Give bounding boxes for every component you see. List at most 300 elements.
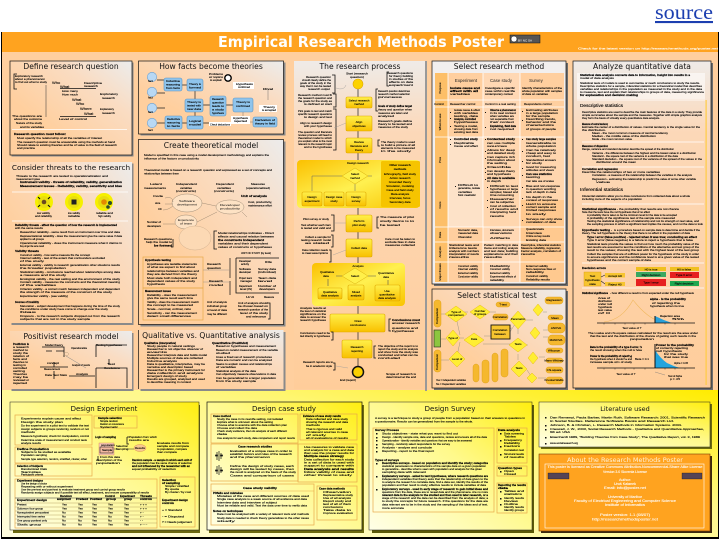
panel: select statistical test: Parametric [511, 317, 526, 321]
panel: design survey: Open [504, 469, 514, 473]
latest version note: Check for the latest version on http://researchmethods.org/poster.net [578, 46, 718, 50]
panel: analyze quantitative data: Regression - estimating the relationship to predict the value of some other variable [592, 177, 696, 181]
panel: how facts become theories: reasoning [167, 120, 180, 124]
panel: create theoretical model: (constructs) [214, 189, 234, 193]
flow: theory box [346, 138, 372, 153]
chart: decision table: Right decision [642, 273, 661, 277]
panel: design experiment: Design the study plan [21, 420, 63, 424]
panel: design experiment: Subjects to be studied as available [21, 450, 71, 454]
panel: analyze quantitative data: is a procedure based on sample data to determine and decide if the [614, 228, 700, 232]
flow: theory box: literature and [350, 144, 368, 148]
panel: about the poster [539, 454, 712, 533]
panel: qualitative vs quantitative analysis: Seeks to explain causes and relationships [216, 362, 272, 366]
panel: select statistical test: T-test [499, 302, 507, 306]
table: methods comparison: Researcher [490, 197, 514, 201]
panel: design case study: Evidence of case study results [303, 414, 341, 418]
panel: consider threats to the research: Maturation - subject development that happens during the time of the study [20, 304, 120, 308]
table: methods comparison: Can take use of scales [526, 179, 554, 183]
table: methods comparison: Reliability [490, 264, 511, 268]
annotations: left of flow: to design and test [304, 115, 332, 119]
table: methods comparison: with variables [454, 111, 479, 115]
annotations: left of flow: to meet assumptions [302, 251, 328, 255]
panel: design survey: data relevant are to be in the study and the sampling of the ideas and of test. [382, 502, 488, 506]
panel: qualitative vs quantitative analysis: Researcher is the primary instrument for [147, 368, 205, 372]
panel: select research method: Select research method [454, 62, 544, 71]
icon: creative commons badge: BY NC SA [518, 38, 532, 42]
panel: qualitative vs quantitative analysis: studied [216, 351, 230, 355]
table: methods comparison: Cause and effect [454, 144, 478, 148]
annotations: right of flow: to build a picture of all [381, 143, 415, 147]
annotations: left of flow: as stated [305, 241, 330, 245]
panel: analyze quantitative data: simple summaries about the sample and the measures. Together with simple graphics analysis [582, 113, 702, 117]
table: methods comparison: time consuming [490, 193, 514, 197]
panel: consider threats to the research: a measure and the study [20, 273, 67, 277]
flow: start circle [346, 72, 368, 89]
flow: select research method box [346, 97, 372, 108]
block: analysis: data [383, 275, 389, 279]
block: analysis: Qualitative [320, 270, 335, 274]
panel: consider threats to the research: Validity threats [15, 249, 39, 253]
annotations: left of flow: data to answer the [300, 315, 326, 319]
chart: distribution one-tailed [582, 291, 698, 341]
table: methods comparison: not separable from [490, 117, 514, 121]
table: variables by level: Number of [258, 284, 276, 288]
block: design [297, 160, 420, 208]
box: measurement issues [143, 288, 203, 320]
flow: perform box: Perform [354, 219, 365, 223]
box: measurement issues: Validity - does the measurement match [147, 300, 199, 304]
panel: create theoretical model: Code [153, 194, 163, 198]
flow: start circle: question) [350, 75, 364, 79]
table: experiment designs: No [108, 518, 112, 522]
panel: design survey: to study the concepts for future research. If the questions for the data are [382, 499, 488, 503]
annotations: right of flow: in the study [381, 149, 412, 153]
annotations: right of flow: effects on data [389, 80, 413, 84]
panel: analyze quantitative data: Statistical data analysis converts data to information, insight into results in a [580, 73, 690, 77]
panel: select statistical test: Correlation [493, 328, 508, 332]
box: measurement issues: Sensitivity - can the measurement [147, 311, 197, 315]
panel: design survey: Exploratory surveys - used in early stage of research to gain initial ideas and [382, 487, 488, 491]
panel: positivist research model: controlled [13, 366, 27, 370]
table: methods comparison: No depth in the [526, 195, 552, 199]
panel: select statistical test: Comparison [435, 308, 439, 324]
callout: bracket notes: Model relationships indicates - Direct [218, 231, 274, 235]
panel: design survey: Study objectives - state what you want to find out [382, 432, 458, 436]
panel: consider threats to the research: Criterion validity - a correct match between independent and dependent [20, 287, 120, 291]
table: methods comparison: hypotheses or large [490, 187, 518, 191]
panel: consider threats to the research: of the study [20, 259, 45, 263]
chart: decision table: Type II error [676, 273, 692, 277]
panel: design case study: Observation [323, 490, 352, 494]
annotations: left of flow: Collect a sample for [305, 235, 331, 239]
panel: about the poster: University of Maribor [608, 495, 643, 499]
panel: consider threats to the research: they all get the same result [20, 244, 44, 248]
panel: analyze quantitative data: Inferential statistics allow you to draw conclusions from collected data about a whole [582, 194, 690, 198]
panel: define research question: Nature of the study [16, 121, 43, 125]
panel: consider threats to the research: Ecological validity - the real setting and the environment of the study [20, 277, 121, 281]
panel: analyze quantitative data: Collect the samples that are of sufficient power for the hypothesis of the study in order [587, 252, 699, 256]
panel: about the poster: This poster is licensed as Creative Commons Attribution-Noncommercial-Share Alike License [548, 465, 702, 469]
box: hypothesis testing: Hypothesis testing [145, 258, 171, 262]
table: variables by level: research question of the [238, 308, 268, 312]
panel: analyze quantitative data: - the probability that results are not chance [617, 207, 679, 211]
table: methods comparison: of results and [490, 207, 519, 211]
flow: end circle [352, 366, 364, 378]
panel: design survey: Explanatory surveys - asked to test hypotheses, where research questions are [382, 474, 488, 478]
table: variables by level: developers [259, 287, 276, 291]
table: experiment designs: Control [105, 494, 115, 498]
panel: about the poster: Institute of Informatics [605, 503, 645, 507]
table: methods comparison: in a large population [526, 111, 558, 115]
annotations: left of flow: Data collection needs [302, 248, 328, 252]
panel: design experiment [10, 402, 200, 533]
panel: about the poster: Poster version: 1.1 (08/07) [600, 513, 650, 517]
panel: analyze quantitative data: Hypothesis testing - [582, 228, 612, 232]
panel: design survey: Tables [504, 434, 517, 438]
panel: design case study: Report study and [323, 499, 351, 503]
table: methods comparison: Observation [458, 235, 472, 239]
annotations: left of flow: research output [308, 87, 330, 91]
chart: distribution one-tailed: - how different a result is from expected under the null hypothesis [610, 291, 694, 295]
panel: design experiment: Random or convenience [100, 422, 124, 426]
table: variables by level: Department [239, 284, 252, 288]
block: analysis: Quantitative [378, 271, 394, 275]
panel: design case study: Pitfalls and mistakes [213, 491, 243, 495]
panel: design survey: a questionnaire. Results can be generalized from the sample to the whole. [375, 420, 473, 424]
flow: perform box: pilot study [352, 223, 366, 227]
annotations: left of flow: Analysis results at [300, 306, 326, 310]
annotations: right of flow: experiment [389, 83, 413, 87]
table: experiment designs: No [62, 510, 66, 514]
table: methods comparison: characteristics [526, 123, 555, 127]
panel: create theoretical model: Dependent [216, 182, 234, 186]
heading: inferential statistics: Inferential statistics [580, 187, 623, 192]
box: measurement issues: Measurement issues [145, 289, 171, 293]
panel: analyze quantitative data: Median - the middle value of the distribution [592, 134, 656, 138]
panel: how facts become theories: Deductive [167, 117, 180, 121]
annotations: right of flow: theory and question when [378, 108, 412, 112]
panel: how facts become theories: fact [148, 128, 153, 132]
table: methods comparison: Generalizable to [526, 141, 556, 145]
panel: design experiment: Define Population [17, 447, 49, 451]
panel: qualitative vs quantitative analysis: Researcher is not objective observer of [147, 347, 203, 351]
panel: design experiment: Randomly assign subjects and if possible test all effect, treatment, and ensure comparability of results [21, 490, 149, 494]
panel: design survey: population and then result to study; effective results to include variables of data [382, 483, 486, 487]
callout: bracket notes: Research questions [144, 237, 173, 241]
chart: distribution two: p = .05 [670, 377, 680, 381]
panel: create theoretical model: Model is specified in this case using a model development methodology and explains the [144, 153, 269, 157]
panel: positivist research model: Operationalize [71, 346, 87, 350]
panel: how facts become theories: to facts [167, 124, 181, 128]
chart: decision table: Accept H0 [608, 274, 622, 278]
panel: positivist research model: study the [13, 351, 28, 355]
panel: design case study: data [217, 432, 228, 436]
table: methods comparison: showing data from [454, 127, 478, 131]
panel: design experiment: Systematic [100, 425, 119, 429]
table: experiment designs: Yes [78, 514, 83, 518]
panel: qualitative vs quantitative analysis: events [147, 350, 168, 354]
table: methods comparison: observations [490, 231, 513, 235]
annotations: left of flow: significance on the [300, 312, 326, 316]
panel: select statistical test: Type of [451, 310, 461, 314]
chart: distribution one-tailed: population [630, 337, 655, 341]
chart: distribution one-tailed: alpha - is the probability [650, 297, 686, 301]
table: methods comparison: Major threats [438, 263, 442, 281]
annotations: left of flow: The question and literature [298, 130, 332, 134]
callout: bracket notes: effects and causal relation between [218, 234, 274, 238]
table: experiment designs: Yes [92, 510, 97, 514]
panel: how facts become theories: from facts [166, 86, 181, 90]
block: analysis: data analysis [321, 294, 339, 298]
panel: design survey: sampling data with relevant [382, 470, 426, 474]
panel: how facts become theories: to explain [210, 78, 222, 82]
table: experiment designs: Yes [108, 506, 113, 510]
table: variables by level: individual group [207, 304, 227, 308]
panel: select statistical test: comparison [448, 313, 464, 317]
panel: analyze quantitative data: Correlation - a measure of the relationship between the variables in the analysis [592, 173, 692, 177]
panel: design survey: Frequency [504, 438, 523, 442]
panel: create theoretical model: Number of [147, 220, 161, 224]
panel: about the poster: Author: [619, 478, 631, 482]
chart: distribution one-tailed: of rejecting the [652, 301, 680, 305]
panel: analyze quantitative data: Range, variance and standard deviation describe the spread of the distribution [582, 147, 674, 151]
panel: design survey: Sampling - randomly select respondents for the survey [382, 442, 450, 446]
panel: consider threats to the research: the conditions under study have come to change over the study [20, 307, 109, 311]
annotations: left of flow: with your hypotheses [304, 124, 332, 128]
panel: design case study: Choose what to examine with the data collection plan [217, 423, 287, 427]
panel: select statistical test: Correlation [493, 315, 508, 319]
table: methods comparison: Difficult to [458, 183, 478, 187]
callout: bracket notes: help the model to [146, 240, 172, 244]
panel: literature used [539, 402, 712, 449]
table: experiment designs: assignment [57, 497, 71, 501]
chart: distribution two: of correctly rejecting [656, 346, 688, 350]
panel: select research method [432, 61, 568, 286]
panel: create theoretical model: Theoretical model is based on a research question and expressed as a set of concepts and [144, 168, 272, 172]
bubbles: constructs: Experience [178, 218, 194, 222]
panel: literature used: Creswell, J. W., 2003, Social Research Methods - Qualitative and Quantitative Approaches, [550, 427, 704, 431]
panel: how facts become theories: Problems [209, 72, 224, 76]
panel: create theoretical model: Latent [150, 182, 162, 186]
panel: analyze quantitative data: value [596, 180, 611, 184]
table: experiment designs: + - [140, 510, 144, 514]
table: methods comparison: and text data; building [484, 249, 518, 253]
panel: design survey: stage of the research and the data can be described from the analysis of data; a [382, 496, 488, 500]
block: analysis: Qualitative [323, 290, 337, 294]
panel: how facts become theories: confirmed [236, 104, 250, 108]
panel: consider threats to the research: the strength of the measure of the construct of the study [20, 290, 113, 294]
panel: design survey: Tables and [504, 489, 524, 493]
panel: analyze quantitative data: A probability of the significance test of the sample size measured [587, 216, 675, 220]
table: methods comparison: Explaining, field data [490, 124, 516, 128]
icon: creative commons badge [510, 35, 540, 43]
table: experiment designs: No [78, 518, 82, 522]
box: other research methods: Case and field study [386, 188, 414, 192]
annotations: right of flow: answer research [392, 321, 420, 325]
block: design: Design case [326, 195, 343, 199]
panel: create theoretical model: developers [147, 224, 161, 228]
flow: select research method box: method [354, 102, 364, 106]
panel: the research process: The research process [319, 62, 401, 71]
table: methods comparison: cheap and easy to [526, 151, 556, 155]
table: variables by level: IDE [265, 260, 272, 264]
table: methods comparison: Controlled study [454, 137, 478, 141]
annotations: right of flow: theory to be tested and [378, 122, 412, 126]
table: methods comparison: Can develop theory [487, 169, 516, 173]
panel: define research question: How many [62, 89, 79, 93]
panel: design case study: Study the case in its real-life setting, not isolated [217, 417, 283, 421]
table: methods comparison: Experimental effects of [490, 274, 516, 278]
panel: define research question: Define research question [23, 62, 119, 71]
icons: validity targets: high validity [98, 214, 111, 218]
panel: how facts become theories: leads to [212, 104, 224, 108]
chart: distribution two: for the study [664, 352, 689, 356]
table: methods comparison: All data is available [487, 176, 515, 180]
panel: analyze quantitative data: result to the values; choosing the test with the highest level of the test group [587, 248, 699, 252]
table: methods comparison: Difficult to test [490, 184, 518, 188]
flow: collect data box [346, 239, 372, 257]
table: methods comparison: results [449, 255, 470, 259]
panel: qualitative vs quantitative analysis: Can be generalized to a larger population [216, 376, 276, 380]
annotations: left of flow: Test whether each item [301, 223, 331, 227]
panel: design experiment: the population has the same chance of selection [132, 461, 192, 465]
panel: design survey: Closed [504, 472, 516, 476]
annotations: right of flow: Care must be taken to [385, 237, 415, 241]
annotations: left of flow: theoretical model to which [298, 136, 332, 140]
chart: distribution two: the hypothesis when it should be and [590, 357, 632, 361]
table: methods comparison: Isolate cause and [450, 86, 480, 90]
annotations: right of flow: exclude bias in data [385, 240, 415, 244]
box: other research methods: Interview, focus [390, 196, 411, 200]
annotations: left of flow: be in academic style [306, 364, 332, 368]
table: experiment designs: Yes [108, 522, 113, 526]
table: methods comparison: in its real context [490, 111, 516, 115]
panel: define research question: to find out what to study [15, 80, 48, 84]
panel: consider threats to the research: Threats to the research are tested to operationalization and [16, 174, 108, 178]
panel: design case study: Use analysis for each study, data comparison and report results [217, 436, 295, 440]
annotations: left of flow: tied directly to hypotheses [300, 334, 330, 338]
panel: design experiment: Randomized trials [21, 467, 48, 471]
panel: positivist research model: testing in [13, 363, 26, 367]
block: analysis: Select [351, 274, 359, 278]
table: methods comparison [434, 73, 564, 282]
table: experiment designs: Yes [62, 506, 67, 510]
poster title: Empirical Research Methods Poster [218, 33, 505, 51]
chart: decision table: H0 is true [645, 267, 658, 271]
table: methods comparison: their context [490, 120, 514, 124]
panel: design experiment: Do the experiment in a pilot test to validate the test [21, 424, 89, 428]
panel: analyze quantitative data: A probability that is taken to be the minimum level for the data to be accepted [587, 213, 677, 217]
annotations: right of flow: study items is to [380, 219, 415, 223]
panel: define research question: Exploratory [100, 92, 119, 96]
panel: select statistical test: Regression [546, 298, 562, 302]
annotations: left of flow: Research reports are to [303, 360, 333, 364]
panel: how facts become theories: Inductive [166, 79, 180, 83]
panel: design survey: Outline [504, 502, 518, 506]
panel: design survey: Review [504, 499, 519, 503]
annotations: left of flow: Align to research design [300, 121, 332, 125]
panel: consider threats to the research: measurement types [16, 177, 40, 181]
panel: qualitative vs quantitative analysis: Based on careful measurement of the variable [216, 348, 278, 352]
panel: define research question: research [84, 84, 98, 88]
block: design: Select [351, 172, 359, 176]
box: hypothesis testing: hypothesis [147, 282, 166, 286]
panel: design experiment: Logic of sampling [95, 435, 116, 439]
panel: design case study: Data collection for each study [304, 458, 355, 462]
panel: design case study: Case study validity [243, 486, 277, 490]
chart: decision table: Right decision [675, 282, 694, 286]
annotations: right of flow: process [378, 95, 403, 99]
chart: distribution one-tailed: Test value of T [622, 326, 642, 330]
table: methods comparison: Allows for deep [487, 148, 515, 152]
block: analysis [312, 263, 405, 306]
table: methods comparison: variables [458, 190, 473, 194]
annotations: right of flow: elements to be measured [381, 146, 415, 150]
sidebar: validity notes: By cluster / by cost [165, 490, 191, 494]
panel: design case study: Choose and collect the data [217, 426, 257, 430]
table: methods comparison: measured data [458, 231, 478, 235]
panel: positivist research model: theories to [13, 360, 28, 364]
panel: positivist research model: reviewed or [13, 378, 29, 382]
panel: analyze quantitative data: they form the basis of virtually every quantitative data analysis. [582, 116, 660, 120]
panel: define research question: Exploratory research [15, 74, 43, 78]
panel: how facts become theories: rejected [234, 119, 247, 123]
panel: design case study: Check study evidence, then do analysis of each different [217, 429, 287, 433]
panel: qualitative vs quantitative analysis: narrative and description based [147, 365, 193, 369]
panel: positivist research model: Positivist research model [24, 332, 118, 341]
panel: qualitative vs quantitative analysis: Study people in natural settings [147, 344, 196, 348]
chart: decision table: Reject H0 [608, 282, 622, 286]
table: experiment designs: Yes [124, 514, 129, 518]
table: methods comparison: generalize, isolate [458, 186, 480, 190]
sidebar: validity notes: + = Standard [162, 508, 182, 512]
panel: analyze quantitative data: for explanation and decision making [580, 93, 638, 97]
panel: about the poster: Version 3.0 Slovenia License [603, 470, 647, 474]
panel: define research question: Who [76, 101, 85, 106]
annotations: right of flow: analyzed [378, 114, 394, 118]
panel: consider threats to the research: Dropouts - to the research subjects dropped out from the research [20, 314, 120, 318]
panel: design case study: Case data methods [319, 486, 345, 490]
panel: design survey: Analysis - analyze and conclude [382, 446, 432, 450]
panel: design experiment: Population from which [129, 435, 157, 439]
chart: distribution two: the result showing when the null is false [590, 348, 642, 352]
bubbles: constructs: Software [179, 199, 195, 203]
chart: decision table: state [589, 282, 596, 286]
table: variables by level: Unit [246, 295, 254, 299]
chart: distribution two: Beta is the probability of a type II error, is [590, 345, 642, 349]
panel: select statistical test: Tests [514, 342, 522, 346]
panel: design experiment: sample and compare [157, 444, 189, 448]
chart: distribution one-tailed: 5% [672, 317, 685, 321]
table: methods comparison: information about [487, 158, 515, 162]
table: methods comparison: Purpose [438, 82, 442, 94]
annotations: left of flow: Research method must fit [298, 93, 332, 97]
panel: positivist research model: Data Test Stats [45, 373, 68, 377]
annotations: right of flow: questions and [392, 326, 418, 330]
sidebar: validity notes: of sampling [162, 481, 180, 485]
chart: decision table: hypothesis [585, 278, 600, 282]
panel: analyze quantitative data: the sampling process in which a significant test implies the causes, and not the data to look [587, 222, 703, 226]
panel: create theoretical model: measurements [144, 186, 167, 190]
panel: create theoretical model: (constructs) [176, 189, 196, 193]
panel: select statistical test: Mean [551, 316, 559, 320]
block: design: Design [351, 195, 361, 199]
sidebar: validity notes: Selection [162, 478, 176, 482]
panel: select statistical test: ANOVA [551, 326, 561, 330]
table: methods comparison: Case study [490, 78, 513, 83]
panel: qualitative vs quantitative analysis: Qualitative vs. Quantitative analysis [142, 331, 280, 340]
panel: literature used: 6th ed. USA [550, 430, 570, 434]
